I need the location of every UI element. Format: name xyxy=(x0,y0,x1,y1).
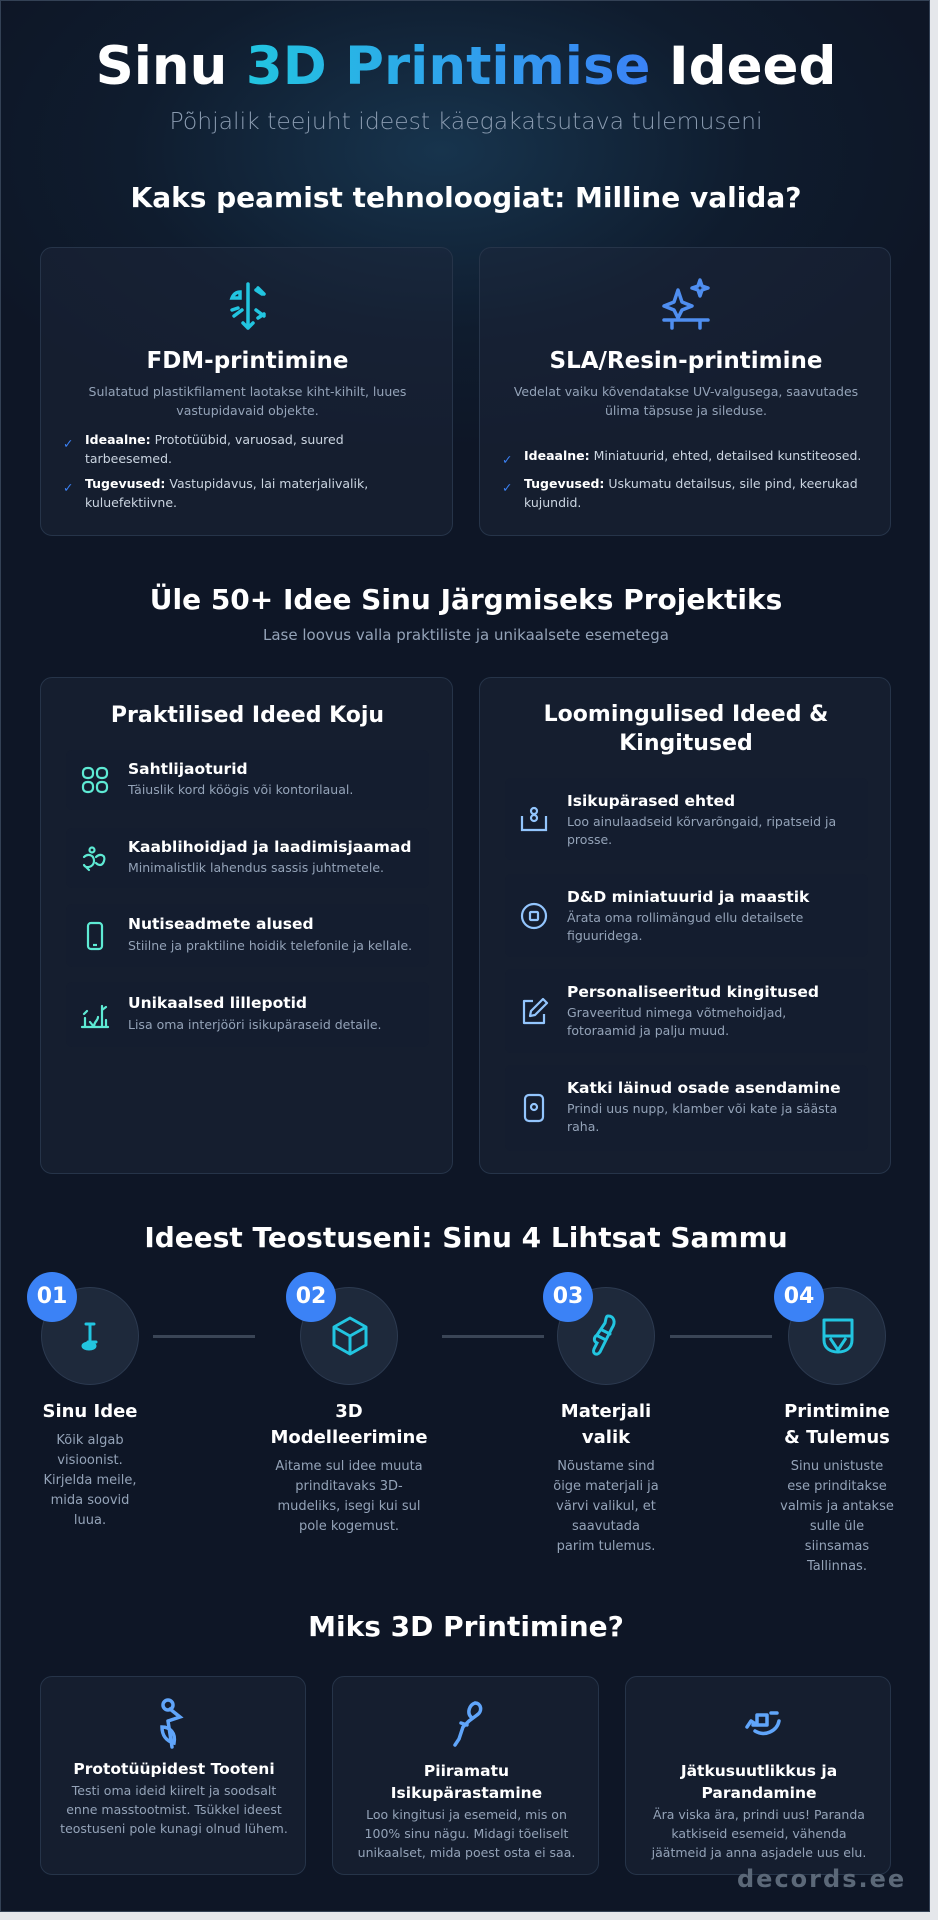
list: FDM bullets: ✓ xyxy=(63,436,73,451)
step 4 xyxy=(774,1272,894,1574)
list: SLA bullets: Ideaalne: Miniatuurid, ehted, detailsed kunstiteosed. xyxy=(524,448,861,463)
heading: sustainability: Parandamine xyxy=(701,1784,817,1802)
item: jewelry: Loo ainulaadseid kõrvarõngaid, ripatseid ja prosse. xyxy=(567,814,836,847)
heading: practical: Praktilised Ideed Koju xyxy=(111,703,384,728)
text: sustainability: katkiseid esemeid, vähenda xyxy=(671,1826,847,1841)
text: prototype: Testi oma ideid kiirelt ja soodsalt xyxy=(72,1783,276,1798)
step 1 xyxy=(27,1272,139,1528)
item: replacement parts: Prindi uus nupp, klamber või kate ja säästa raha. xyxy=(567,1101,837,1134)
text: sustainability xyxy=(651,1807,866,1860)
item: drawer organizers: Täiuslik kord köögis või kontorilaual. xyxy=(128,782,353,797)
heading: sustainability xyxy=(680,1762,837,1802)
item: cable holders: Kaablihoidjad ja laadimisjaamad xyxy=(128,838,411,856)
step 1: Kõik algab visioonist. Kirjelda meile, mida soovid luua. xyxy=(43,1433,137,1528)
connector arrows xyxy=(153,1335,255,1338)
item: drawer organizers xyxy=(66,750,429,810)
text: parim tulemus. xyxy=(557,1539,655,1554)
heading: prototype: Prototüüpidest Tooteni xyxy=(73,1760,275,1778)
item: personalized gifts xyxy=(505,969,868,1053)
heading: creative xyxy=(544,702,828,756)
icon: SLA sparkles xyxy=(662,278,710,330)
item: device stands: Stiilne ja praktiline hoidik telefonile ja kellale. xyxy=(128,938,412,953)
heading: ideas: Üle 50+ Idee Sinu Järgmiseks Projektiks xyxy=(150,583,782,616)
heading: sustainability: Jätkusuutlikkus ja xyxy=(681,1762,837,1780)
heading: personalization: Isikupärastamine xyxy=(391,1784,542,1802)
step 4: ese prinditakse xyxy=(787,1479,887,1494)
step 2: Aitame sul idee muuta prinditavaks 3D-mudeliks, isegi kui sul pole kogemust. xyxy=(275,1459,423,1534)
item: drawer organizers: Sahtlijaoturid xyxy=(128,760,248,778)
panel: practical ideas xyxy=(40,677,453,1174)
text: FDM description: Sulatatud plastikfilament laotakse kiht-kihilt, luues vastupidavaid objekte. xyxy=(89,384,406,418)
step 3: 03 xyxy=(553,1284,583,1309)
list: SLA bullets xyxy=(502,448,861,510)
heading: why: Miks 3D Printimine? xyxy=(308,1610,624,1643)
step 4: valmis ja antakse xyxy=(780,1499,894,1514)
step 4: & Tulemus xyxy=(784,1427,890,1448)
step 4: sulle üle xyxy=(810,1519,864,1534)
item: flower pots: Lisa oma interjööri isikupäraseid detaile. xyxy=(128,1017,382,1032)
step 3: õige materjali ja xyxy=(553,1479,659,1494)
heading: creative: Kingitused xyxy=(619,731,753,756)
step 1: 01 xyxy=(37,1284,67,1309)
item: device stands xyxy=(66,904,429,967)
text: saavutada xyxy=(572,1519,640,1534)
step 4: Printimine xyxy=(784,1401,890,1422)
list: SLA bullets: ✓ xyxy=(502,452,512,467)
step 2: 3D xyxy=(335,1401,363,1422)
subtitle: ideas: Lase loovus valla praktiliste ja unikaalsete esemetega xyxy=(263,626,669,644)
heading: FDM: FDM-printimine xyxy=(146,348,348,374)
icon: prototype xyxy=(160,1698,184,1749)
item: device stands: Nutiseadmete alused xyxy=(128,915,314,933)
item: D&D miniatures: Ärata oma rollimängud ellu detailsete figuuridega. xyxy=(567,910,803,943)
heading: personalization: Piiramatu xyxy=(424,1762,509,1780)
text: SLA description: Vedelat vaiku kõvendatakse UV-valgusega, saavutades ülima täpsuse ja sileduse. xyxy=(514,384,858,418)
text: Tallinnas. xyxy=(807,1559,867,1574)
heading: personalization xyxy=(391,1762,542,1802)
subtitle: Põhjalik teejuht ideest käegakatsutava tulemuseni xyxy=(170,107,762,135)
heading: steps: Ideest Teostuseni: Sinu 4 Lihtsat Sammu xyxy=(144,1221,788,1254)
item: D&D miniatures: D&D miniatuurid ja maastik xyxy=(567,888,809,906)
step 3 xyxy=(543,1272,659,1554)
step 4: 04 xyxy=(784,1284,814,1309)
watermark: decords.ee xyxy=(737,1865,906,1893)
text: prototype: teostuseni pole kunagi olnud lühem. xyxy=(60,1821,288,1836)
step 2: Modelleerimine xyxy=(270,1427,428,1448)
heading: SLA: SLA/Resin-printimine xyxy=(550,348,822,374)
heading: creative: Loomingulised Ideed & xyxy=(544,702,828,727)
text: prototype: enne masstootmist. Tsükkel ideest xyxy=(66,1802,282,1817)
text: sustainability: jäätmeid ja anna asjadele uus elu. xyxy=(652,1845,866,1860)
list: FDM bullets: Tugevused: Vastupidavus, lai materjalivalik, kuluefektiivne. xyxy=(85,476,368,510)
step 3: värvi valikul, et xyxy=(556,1499,656,1514)
icon: personalization xyxy=(453,1701,482,1747)
text: personalization: unikaalset, mida poest osta ei saa. xyxy=(358,1845,575,1860)
title: Sinu 3D Printimise Ideed xyxy=(96,36,836,97)
list: FDM bullets: ✓ xyxy=(63,480,73,495)
item: replacement parts: Katki läinud osade asendamine xyxy=(567,1079,841,1097)
step 2: 02 xyxy=(296,1284,326,1309)
item: D&D miniatures xyxy=(505,874,868,957)
step 3: valik xyxy=(582,1427,630,1448)
step 1: Sinu Idee xyxy=(42,1401,138,1422)
step 3: Nõustame sind xyxy=(557,1459,655,1474)
icon: sustainability xyxy=(745,1711,781,1736)
item: flower pots: Unikaalsed lillepotid xyxy=(128,994,307,1012)
list: FDM bullets: Ideaalne: Prototüübid, varuosad, suured tarbeesemed. xyxy=(85,432,344,466)
list: SLA bullets: ✓ xyxy=(502,480,512,495)
text: personalization: 100% sinu nägu. Midagi tõeliselt xyxy=(365,1826,568,1841)
item: cable holders xyxy=(66,828,429,888)
card: sustainability xyxy=(625,1676,891,1875)
item: cable holders: Minimalistlik lahendus sassis juhtmetele. xyxy=(128,860,384,875)
item: jewelry xyxy=(505,778,868,860)
text: personalization: Loo kingitusi ja esemeid, mis on xyxy=(366,1807,567,1822)
step 2 xyxy=(270,1272,428,1534)
icon: FDM xyxy=(230,282,266,330)
panel: FDM xyxy=(40,247,453,536)
item: flower pots xyxy=(66,982,429,1047)
text: personalization xyxy=(358,1807,575,1860)
list: FDM bullets xyxy=(63,432,368,510)
card: prototypes xyxy=(40,1676,306,1875)
item: personalized gifts: Personaliseeritud kingitused xyxy=(567,983,819,1001)
list: SLA bullets: Tugevused: Uskumatu detailsus, sile pind, keerukad kujundid. xyxy=(524,476,858,510)
item: replacement parts xyxy=(505,1065,868,1151)
panel: SLA xyxy=(479,247,891,536)
text: sustainability: Ära viska ära, prindi uus! Paranda xyxy=(653,1807,865,1822)
item: personalized gifts: Graveeritud nimega võtmehoidjad, fotoraamid ja palju muud. xyxy=(567,1005,786,1038)
panel: creative ideas xyxy=(479,677,891,1174)
text: prototype xyxy=(60,1783,288,1836)
step 4: Sinu unistuste xyxy=(791,1459,883,1474)
item: jewelry: Isikupärased ehted xyxy=(567,792,735,810)
card: personalization xyxy=(332,1676,599,1875)
step 3: Materjali xyxy=(561,1401,651,1422)
heading: technologies: Kaks peamist tehnoloogiat: Milline valida? xyxy=(130,181,802,214)
step 4: siinsamas xyxy=(805,1539,869,1554)
